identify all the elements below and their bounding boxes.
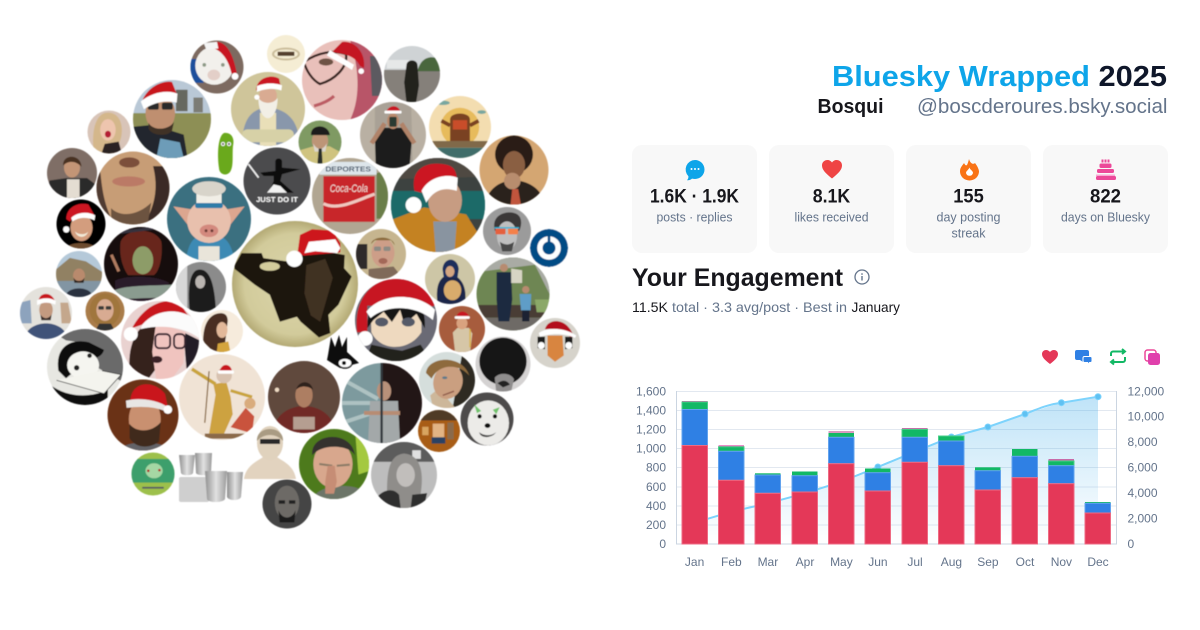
right axis labels: 4,000 <box>1128 486 1158 500</box>
right axis labels: 8,000 <box>1128 435 1158 449</box>
bar: Oct <box>1012 449 1038 544</box>
month labels: Oct <box>1016 555 1035 569</box>
avatar: blonde woman <box>88 110 130 154</box>
month labels: Nov <box>1051 555 1072 569</box>
avatar: woman with glasses and red hair <box>302 40 382 120</box>
stat card: day posting streak <box>906 145 1031 253</box>
avatar: coca-cola sign: Coca-Cola <box>330 183 368 195</box>
month labels: Jul <box>907 555 923 569</box>
avatar: brown-haired woman smiling <box>201 310 243 352</box>
avatar: man in mountains <box>56 251 102 297</box>
avatar: man rubbing his eye in green forest <box>299 429 369 499</box>
avatar: man in orange jacket with santa hat <box>391 158 485 252</box>
bar: Apr <box>792 472 818 544</box>
avatar: just do it graphic: JUST DO IT <box>256 195 298 204</box>
avatar: family in a garden <box>476 258 550 330</box>
stacked bars by month <box>682 401 1110 544</box>
month labels: Dec <box>1087 555 1109 569</box>
stat card: day posting streak: day posting <box>936 210 1001 224</box>
icon: chat bubble <box>686 160 704 180</box>
month labels: Mar <box>758 555 778 569</box>
chart legend icons <box>1042 349 1160 365</box>
avatar: anime character with santa hat <box>355 279 437 361</box>
stat card: days on Bluesky: days on Bluesky <box>1061 210 1151 224</box>
bar: Jul <box>902 428 928 544</box>
avatar: figure in grey parking lot <box>384 46 440 102</box>
handle: @boscderoures.bsky.social <box>917 96 1168 118</box>
left axis labels: 1,000 <box>636 442 666 456</box>
bar: Nov <box>1048 459 1074 544</box>
stat card: posts and replies: posts · replies <box>656 210 732 224</box>
avatar: man at stonehenge with santa hat <box>133 80 211 158</box>
right axis labels: 2,000 <box>1128 512 1158 526</box>
avatar: witch character <box>104 227 178 301</box>
avatar: bulbasaur card <box>132 452 174 496</box>
avatar: white fluffy dog <box>460 392 514 446</box>
month labels: Feb <box>721 555 742 569</box>
icon: heart <box>822 160 842 178</box>
avatar: black and white woman <box>176 262 226 312</box>
stat card: likes received: likes received <box>794 210 869 224</box>
left axis labels: 400 <box>646 499 666 513</box>
left axis labels: 600 <box>646 480 666 494</box>
engagement summary line: 11.5K <box>632 299 669 315</box>
stat card: likes received: 8.1K <box>813 186 851 208</box>
left axis labels: 1,400 <box>636 404 666 418</box>
month labels: Jan <box>685 555 704 569</box>
avatar: blue ring logo <box>530 229 568 267</box>
left axis labels: 800 <box>646 460 666 474</box>
avatar: jimi hendrix <box>480 136 548 204</box>
bar: Mar <box>755 473 780 544</box>
avatar: man with han solo look <box>47 148 97 198</box>
avatar: coca-cola sign: DEPORTES <box>325 164 371 173</box>
bar: Sep <box>975 467 1000 544</box>
avatar: old man portrait with santa hat <box>231 72 305 146</box>
icon: legend heart <box>1042 350 1058 364</box>
stat card: day posting streak: streak <box>952 226 986 240</box>
left axis labels: 1,200 <box>636 422 666 436</box>
month labels: Aug <box>941 555 962 569</box>
avatar: cream logo badge <box>267 35 305 73</box>
right axis labels: 6,000 <box>1128 460 1158 474</box>
avatar: small orange scene <box>418 410 460 452</box>
avatar: man with glasses making a face <box>356 229 406 279</box>
avatar: pig chef <box>167 177 251 261</box>
avatar: sonic plush <box>425 254 475 304</box>
avatar: black and white man with wavy hair <box>371 442 437 508</box>
stat card: days on Bluesky: 822 <box>1090 186 1121 208</box>
avatar: coca-cola sign <box>312 158 388 234</box>
icon: info <box>855 270 869 284</box>
right axis labels: 0 <box>1128 537 1134 551</box>
icon: small black and white mascot <box>327 335 359 368</box>
avatar: close-up of lips <box>96 152 170 224</box>
engagement chart <box>636 384 1165 569</box>
stat card: likes received <box>769 145 894 253</box>
avatar: pickle character <box>218 133 234 175</box>
stat card: posts and replies <box>632 145 757 253</box>
right axis labels: 10,000 <box>1128 410 1165 424</box>
avatar bubble cluster <box>20 35 580 528</box>
left axis labels: 200 <box>646 518 666 532</box>
month labels: Apr <box>796 555 814 569</box>
avatar: marble bust with glasses <box>244 426 296 479</box>
avatar: bald man in dark photo <box>262 480 312 528</box>
left axis labels <box>636 384 666 551</box>
stat card: posts and replies: 1.6K · 1.9K <box>650 186 739 208</box>
stat card: day posting streak: 155 <box>953 186 984 208</box>
avatar: bearded man with santa hat <box>108 380 178 450</box>
avatar: large shadow on cream with santa hat <box>232 221 358 347</box>
icon: legend reposts <box>1111 349 1125 364</box>
month labels: Sep <box>977 555 999 569</box>
bar: Dec <box>1085 502 1110 544</box>
avatar: man in dark red hoodie <box>268 361 340 433</box>
icon: legend replies <box>1075 350 1092 364</box>
avatar: medieval manuscript illustration <box>179 354 265 440</box>
month labels: Jun <box>868 555 888 569</box>
engagement summary line: January <box>852 299 900 315</box>
display name: Bosqui <box>818 96 884 118</box>
stat card: days on Bluesky <box>1043 145 1168 253</box>
avatar: illustrated woman with glasses and santa hat <box>121 301 199 379</box>
avatar: man with neon sunglasses <box>483 207 531 255</box>
engagement summary line <box>632 299 900 315</box>
avatar: black and white comic girl <box>47 329 123 405</box>
month labels: May <box>830 555 853 569</box>
avatar: man in cap <box>298 120 342 164</box>
avatar: split grey and dark photo <box>342 363 422 443</box>
icon: birthday cake <box>1096 160 1116 180</box>
avatar: curly-haired woman with glasses <box>86 292 124 330</box>
bar: Jun <box>865 468 890 544</box>
avatar: man with santa hat in crowd <box>20 287 72 339</box>
cumulative engagement area and line <box>695 394 1101 544</box>
avatar: blond man looking sideways <box>419 352 475 408</box>
left axis labels: 1,600 <box>636 384 666 398</box>
bar: Feb <box>718 445 744 544</box>
bar: Aug <box>938 436 964 544</box>
title: Bluesky Wrapped 2025 <box>832 61 1167 93</box>
avatar: white cat with santa hat <box>190 40 244 94</box>
avatar: child in vintage photo with santa hat <box>439 306 485 352</box>
left axis labels: 0 <box>659 537 666 551</box>
avatar: black curly hair <box>476 336 530 392</box>
bar: Jan <box>682 401 708 544</box>
bar: May <box>828 431 854 544</box>
engagement summary line: total · 3.3 avg/post · Best in <box>672 299 847 315</box>
right axis labels: 12,000 <box>1128 384 1165 398</box>
icon: legend quotes <box>1145 350 1160 365</box>
right axis labels <box>1128 384 1165 551</box>
avatar: smiling man with santa hat <box>56 200 106 248</box>
avatar: just do it graphic <box>244 148 310 214</box>
avatar: chicken drawing with santa hat <box>530 318 580 368</box>
chart grid <box>676 392 1116 525</box>
heading: your engagement: Your Engagement <box>632 264 844 292</box>
avatar: selfie man with santa hat <box>360 102 426 168</box>
icon: flame <box>960 159 979 180</box>
month labels <box>685 555 1109 569</box>
avatar: silver wine cups <box>179 453 243 502</box>
avatar: domo on a pier <box>429 96 491 158</box>
